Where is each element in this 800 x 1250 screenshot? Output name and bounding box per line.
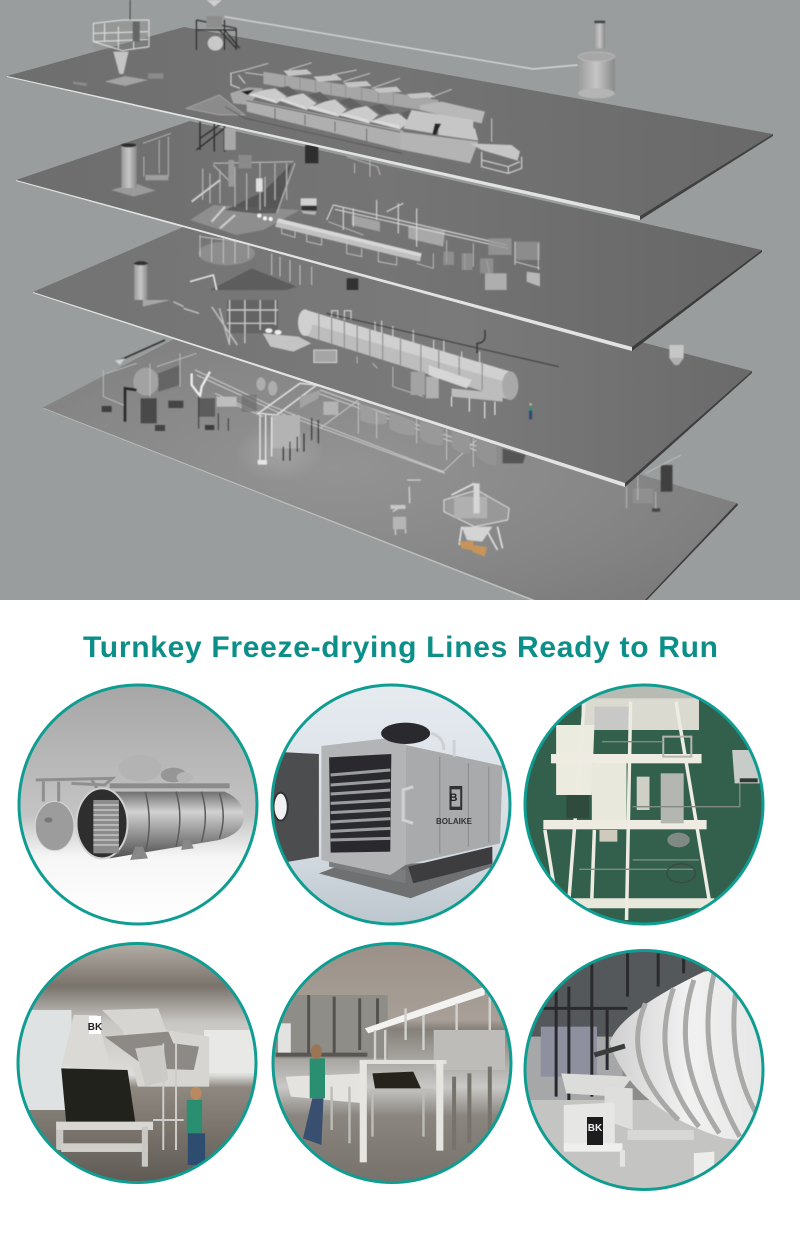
factory layout: exploded floors (0, 0, 800, 600)
title: Turnkey Freeze-drying Lines Ready to Run (83, 631, 718, 664)
belt dryer line (225, 63, 522, 173)
stack on floor 3 (134, 261, 148, 300)
end of tank row (503, 448, 526, 463)
photo circle: large white vacuum vessel: BK (588, 1123, 603, 1134)
exhaust stack (111, 133, 171, 197)
row of cylindrical tanks (358, 402, 497, 467)
main dryer body (247, 99, 403, 149)
photo circle: plant model from above (525, 685, 765, 924)
spray tower on white platform (72, 0, 163, 86)
long air line (224, 17, 578, 69)
logo on dryer hood (89, 1016, 101, 1034)
feed platform (186, 95, 245, 115)
floor 1 (top) (7, 0, 773, 220)
floor 2 (16, 121, 762, 351)
boiler and left equipment (102, 340, 228, 431)
floor 4 (ground level) (42, 338, 738, 600)
dark lattice support (196, 122, 380, 177)
storage tank with chimney (578, 21, 615, 98)
back housing row (230, 63, 452, 110)
process structure (143, 300, 311, 352)
photo circle: process hall with operator (273, 943, 512, 1183)
photo circle: belt dryer with operator (17, 943, 257, 1183)
central pipe racks (192, 370, 497, 473)
photo circle: square freeze dryer cabinet: BOLAIKE (436, 817, 473, 826)
worker figure (529, 403, 532, 419)
floor 3 (33, 224, 752, 487)
photo circle: vacuum tank with open door (19, 685, 257, 924)
silo unit at right (669, 345, 684, 365)
photo circle: belt dryer with operator: BK (88, 1022, 103, 1033)
small hopper unit (390, 480, 421, 535)
horizontal vacuum tank (298, 309, 559, 418)
bin tipping station (196, 0, 240, 51)
brand text on cabinet: B (450, 792, 458, 804)
bag unloading station with pallets (444, 483, 509, 557)
photo circle: square freeze dryer cabinet (271, 685, 511, 924)
pipe frames (327, 200, 508, 275)
right side skids (485, 238, 540, 290)
feed end (230, 87, 263, 105)
dark recesses (277, 86, 302, 98)
long screw conveyor tube (275, 218, 422, 265)
large end hoods (403, 102, 485, 141)
mixing tower (190, 155, 317, 235)
right corner equipment (627, 455, 681, 512)
ring structure under floor 2 (190, 233, 358, 290)
logo on control box (587, 1117, 603, 1145)
photo circle: large white vacuum vessel (525, 950, 765, 1190)
front hoods (249, 88, 409, 129)
end section and tail (400, 132, 478, 163)
